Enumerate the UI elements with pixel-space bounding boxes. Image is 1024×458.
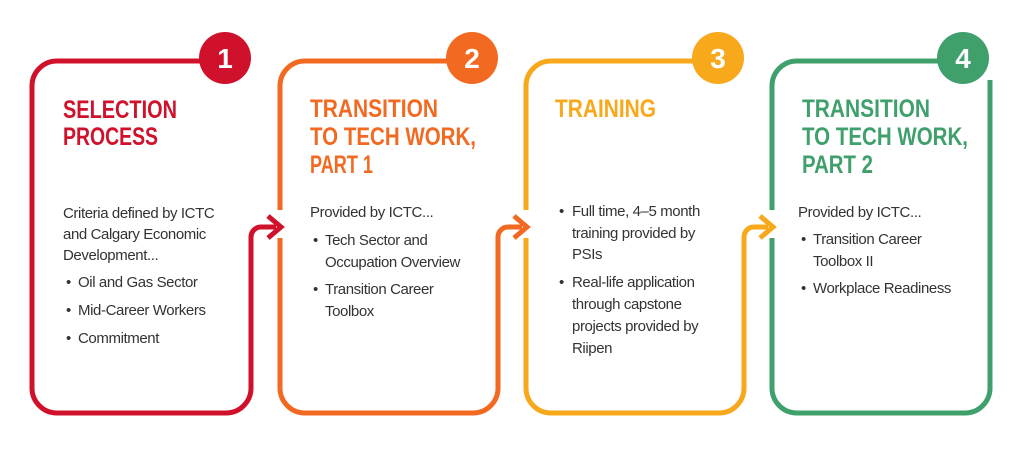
body 3: PSIs [572, 246, 602, 263]
border 1 with arrow [32, 61, 276, 413]
badge 3 [692, 32, 744, 84]
body 2: Toolbox [325, 303, 375, 320]
body 2: Occupation Overview [325, 254, 461, 271]
body 3: projects provided by [572, 318, 699, 335]
border 3 with arrow [526, 61, 768, 413]
badge 4 [937, 32, 989, 84]
panel: step 4 transition part 2 [772, 32, 990, 413]
arrowhead 3 [760, 216, 773, 238]
body 4: Provided by ICTC... [798, 204, 921, 221]
body 1: • [66, 330, 71, 347]
body 1: Development... [63, 247, 158, 264]
body 1: • [66, 302, 71, 319]
body 4: Transition Career [813, 231, 922, 248]
body 1: Criteria defined by ICTC [63, 205, 215, 222]
body 1: Mid-Career Workers [78, 302, 206, 319]
body 3: Full time, 4–5 month [572, 203, 700, 220]
body 4: • [801, 231, 806, 248]
body 4: Toolbox II [813, 253, 873, 270]
title 3: TRAINING [555, 95, 656, 123]
panel: step 3 training [526, 32, 773, 413]
badge 1: 1 [217, 43, 233, 74]
border 2 with arrow [280, 61, 522, 413]
body 3: • [559, 203, 564, 220]
body 2: • [313, 281, 318, 298]
body 2: Tech Sector and [325, 232, 427, 249]
title 4: TRANSITION [802, 95, 930, 123]
arrowhead 1 [268, 216, 281, 238]
title 2: TRANSITION [310, 95, 438, 123]
title 2: PART 1 [310, 151, 373, 179]
title 1: SELECTION [63, 96, 177, 124]
body 1: and Calgary Economic [63, 226, 207, 243]
title 1: PROCESS [63, 123, 158, 151]
panel: step 1 selection process [32, 32, 281, 413]
panel: step 2 transition part 1 [280, 32, 527, 413]
body 1: Oil and Gas Sector [78, 274, 198, 291]
body 3: • [559, 274, 564, 291]
title 4: PART 2 [802, 151, 873, 179]
body 3: through capstone [572, 296, 682, 313]
title 4: TO TECH WORK, [802, 123, 968, 151]
body 2: • [313, 232, 318, 249]
badge 3: 3 [710, 43, 726, 74]
body 3: training provided by [572, 225, 696, 242]
badge 2: 2 [464, 43, 480, 74]
title 2: TO TECH WORK, [310, 123, 476, 151]
body 3: Riipen [572, 340, 612, 357]
body 2: Provided by ICTC... [310, 204, 433, 221]
arrowhead 2 [514, 216, 527, 238]
body 1: Commitment [78, 330, 160, 347]
badge 4: 4 [955, 43, 971, 74]
badge 1 [199, 32, 251, 84]
body 2: Transition Career [325, 281, 434, 298]
body 4: • [801, 280, 806, 297]
body 1: • [66, 274, 71, 291]
border 4 [772, 61, 990, 413]
badge 2 [446, 32, 498, 84]
body 4: Workplace Readiness [813, 280, 951, 297]
body 3: Real-life application [572, 274, 695, 291]
